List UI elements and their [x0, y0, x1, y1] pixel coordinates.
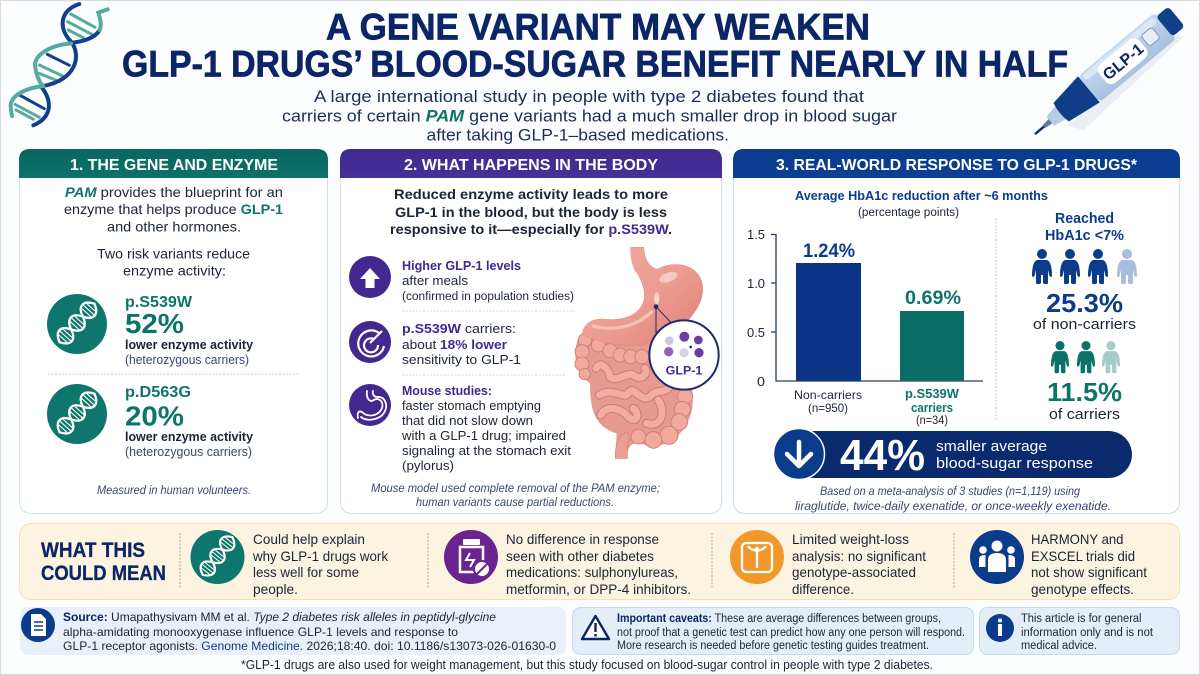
panel: what this could mean [20, 524, 1180, 600]
variant p.D563G: (heterozygous carriers) [125, 445, 252, 459]
note: mouse model: human variants cause partial reductions. [416, 497, 614, 509]
variant p.S539W: lower enzyme activity [125, 338, 253, 352]
finding: mouse studies: faster stomach emptying [402, 398, 541, 413]
caveat text: not proof that a genetic test can predict how any one person will respond. [617, 627, 965, 639]
icon: DNA [190, 530, 244, 584]
icon: DNA variant 2 [47, 384, 107, 444]
panel: source [20, 607, 566, 655]
finding: mouse studies: Mouse studies: [402, 383, 492, 398]
variant p.D563G [125, 384, 253, 459]
callout: 44% smaller response: 44% [840, 431, 925, 480]
x label: non-carriers: (n=950) [808, 401, 848, 415]
icon: down arrow [774, 428, 824, 480]
implication: weight loss: difference. [792, 581, 854, 597]
variants intro [97, 246, 250, 278]
lead statement: Reduced enzyme activity leads to more [394, 186, 668, 202]
finding: mouse studies: that did not slow down [402, 413, 533, 428]
implication: trials: HARMONY and [1031, 531, 1124, 547]
stat: 11.5% [1047, 377, 1122, 423]
implication: weight loss: Limited weight-loss [792, 531, 909, 547]
caveat text [617, 613, 965, 652]
bar chart: 0 [757, 374, 765, 389]
icon: warning triangle [582, 616, 609, 639]
callout: 44% smaller response [774, 428, 1132, 480]
implication: weight loss: analysis: no significant [792, 548, 926, 564]
icon: stomach [349, 384, 391, 426]
implication: trials: EXSCEL trials did [1031, 548, 1135, 564]
panel: real-world response [733, 149, 1180, 514]
bar chart: 0.5 [747, 325, 765, 340]
stat: 25.3%: 25.3% [1046, 288, 1123, 318]
icon: document [21, 608, 55, 642]
finding: lower sensitivity [402, 321, 521, 367]
source citation: GLP-1 receptor agonists. Genome Medicine. 2026;18:40. doi: 10.1186/s13073-026-01630-0 [63, 639, 556, 653]
note: mouse model: Mouse model used complete removal of the PAM enzyme; [371, 483, 660, 495]
variant p.S539W: 52% [125, 308, 184, 339]
intro text: PAM provides the blueprint for an [65, 184, 283, 200]
implication: other medications: seen with other diabetes [506, 548, 654, 564]
icon: weight scale [730, 530, 784, 584]
heading: WHAT THIS [41, 539, 145, 562]
finding: mouse studies: (pylorus) [402, 458, 454, 473]
callout: 44% smaller response: smaller average [936, 438, 1047, 455]
x label: carriers: carriers [911, 401, 953, 415]
implication: other medications: medications: sulphonylureas, [506, 564, 678, 580]
implication: other medications [506, 531, 691, 597]
note: meta-analysis: liraglutide, twice-daily exenatide, or once-weekly exenatide. [795, 501, 1111, 513]
bar chart: 1.0 [747, 276, 765, 291]
disclaimer text: medical advice. [1021, 640, 1097, 652]
subtitle: carriers of certain PAM gene variants had a much smaller drop in blood sugar [282, 107, 897, 126]
source citation [63, 610, 556, 653]
implication: other medications: No difference in response [506, 531, 659, 547]
icon: up arrow [349, 256, 391, 298]
finding: mouse studies [401, 383, 571, 473]
implication: explain: less well for some [253, 564, 359, 580]
pictogram: carriers [1051, 341, 1120, 373]
disclaimer text [1021, 613, 1154, 652]
illustration: stomach and intestines [575, 247, 719, 458]
finding: higher GLP-1 [402, 258, 574, 303]
implication: weight loss: genotype-associated [792, 564, 916, 580]
variant p.S539W: p.S539W [125, 294, 192, 311]
chart title: (percentage points) [858, 207, 959, 219]
icon: GLP-1 injection pen: GLP-1 [1100, 41, 1147, 84]
bar chart [747, 227, 983, 427]
panel 1 header: 1. THE GENE AND ENZYME [70, 157, 278, 174]
x label: non-carriers [794, 388, 862, 415]
panel: disclaimer [980, 608, 1180, 654]
variant p.S539W: (heterozygous carriers) [125, 353, 249, 367]
caveat text: More research is needed before genetic testing guides treatment. [617, 640, 929, 652]
implication: trials: genotype effects. [1031, 581, 1134, 597]
lead statement [390, 186, 672, 237]
implication: explain [252, 531, 389, 597]
x label: non-carriers: Non-carriers [794, 388, 862, 402]
finding: lower sensitivity: sensitivity to GLP-1 [402, 352, 521, 367]
x label: carriers [905, 387, 959, 427]
icon: DNA helix top left [11, 4, 108, 125]
subtitle: A large international study in people with type 2 diabetes found that [314, 87, 864, 106]
title [122, 6, 1068, 84]
stat heading: reached HbA1c below 7%: HbA1c <7% [1045, 228, 1124, 244]
note: meta-analysis: Based on a meta-analysis of 3 studies (n=1,119) using [820, 486, 1081, 498]
chart title: Average HbA1c reduction after ~6 months [795, 188, 1048, 203]
title: GLP-1 DRUGS’ BLOOD-SUGAR BENEFIT NEARLY IN HALF [122, 43, 1068, 84]
title: A GENE VARIANT MAY WEAKEN [326, 6, 870, 47]
icon: group of people [970, 530, 1024, 584]
disclaimer text: This article is for general [1021, 613, 1142, 625]
bar chart: 1.5 [747, 227, 765, 242]
intro text: enzyme that helps produce GLP-1 [64, 201, 283, 217]
panel 2 header [340, 149, 722, 178]
panel 1 header [19, 149, 328, 178]
subtitle: after taking GLP-1–based medications. [426, 126, 729, 145]
panel 3 header: 3. REAL-WORLD RESPONSE TO GLP-1 DRUGS* [776, 157, 1138, 174]
variant p.S539W [125, 294, 253, 367]
callout: GLP-1 magnifier: GLP-1 [666, 364, 702, 378]
heading: COULD MEAN [41, 562, 166, 585]
x label: carriers: p.S539W [905, 387, 959, 401]
caveat text: Important caveats: These are average differences between groups, [617, 613, 941, 625]
finding: mouse studies: with a GLP-1 drug; impaired [401, 428, 566, 443]
stomach [583, 247, 703, 346]
callout: GLP-1 magnifier [649, 304, 719, 390]
implication: explain: people. [253, 581, 298, 597]
panel: what happens in the body [340, 149, 722, 514]
variant p.D563G: 20% [125, 400, 184, 432]
panel: important caveats [572, 608, 974, 654]
pictogram: non-carriers [1032, 249, 1137, 284]
stat: 25.3%: of non-carriers [1033, 317, 1136, 333]
x label: carriers: (n=34) [916, 415, 948, 427]
stat: 25.3% [1033, 288, 1136, 333]
note: mouse model [371, 483, 660, 509]
implication: weight loss [792, 531, 926, 597]
variants intro: Two risk variants reduce [97, 246, 250, 262]
callout: 44% smaller response: blood-sugar response [936, 455, 1093, 472]
icon: info [986, 614, 1014, 642]
note: meta-analysis [795, 486, 1111, 513]
variant p.D563G: lower enzyme activity [125, 430, 253, 444]
bar: carriers [900, 288, 964, 381]
stat: 11.5%: 11.5% [1047, 377, 1122, 407]
stat heading: reached HbA1c below 7%: Reached [1055, 211, 1114, 227]
finding: lower sensitivity: about 18% lower [402, 337, 507, 352]
chart title [795, 188, 1048, 219]
finding: mouse studies: signaling at the stomach exit [402, 443, 571, 458]
intro text [64, 184, 283, 234]
implication: explain: why GLP-1 drugs work [252, 548, 389, 564]
lead statement: responsive to it—especially for p.S539W. [390, 221, 672, 237]
finding: higher GLP-1: (confirmed in population studies) [402, 291, 574, 303]
intestines [575, 333, 693, 458]
panel: the gene and enzyme [19, 149, 328, 514]
implication: trials: not show significant [1031, 564, 1147, 580]
bar: non-carriers: 1.24% [803, 241, 855, 262]
finding: higher GLP-1: Higher GLP-1 levels [402, 258, 521, 273]
source citation: alpha-amidating monooxygenase influence GLP-1 levels and response to [63, 625, 458, 639]
variant p.D563G: p.D563G [125, 384, 191, 401]
subtitle [282, 87, 897, 145]
note: measured in volunteers: Measured in human volunteers. [97, 485, 251, 497]
icon: pill bottle [444, 530, 498, 584]
implication: trials [1031, 531, 1147, 597]
variants intro: enzyme activity: [123, 262, 226, 278]
disclaimer text: information only and is not [1021, 627, 1154, 639]
implication: explain: Could help explain [253, 531, 365, 547]
icon: target [349, 321, 391, 363]
footnote: *GLP-1 drugs are also used for weight management, but this study focused on blood-sugar control in people with type 2 diabetes. [241, 658, 933, 672]
stat: 11.5%: of carriers [1049, 407, 1120, 423]
source citation: Source: Umapathysivam MM et al. Type 2 diabetes risk alleles in peptidyl-glycine [63, 610, 496, 624]
lead statement: GLP-1 in the blood, but the body is less [395, 204, 667, 220]
finding: lower sensitivity: p.S539W carriers: [402, 321, 516, 336]
panel 3 header [733, 149, 1180, 178]
icon: GLP-1 injection pen [1024, 3, 1194, 156]
intro text: and other hormones. [107, 218, 241, 234]
implication: other medications: metformin, or DPP-4 inhibitors. [506, 581, 691, 597]
bar: carriers: 0.69% [905, 288, 961, 309]
bar: non-carriers [796, 241, 861, 381]
panel 2 header: 2. WHAT HAPPENS IN THE BODY [404, 157, 658, 174]
finding: higher GLP-1: after meals [402, 273, 469, 288]
icon: DNA variant 1 [47, 294, 107, 354]
stat heading: reached HbA1c below 7% [1045, 211, 1124, 244]
heading [41, 539, 166, 585]
